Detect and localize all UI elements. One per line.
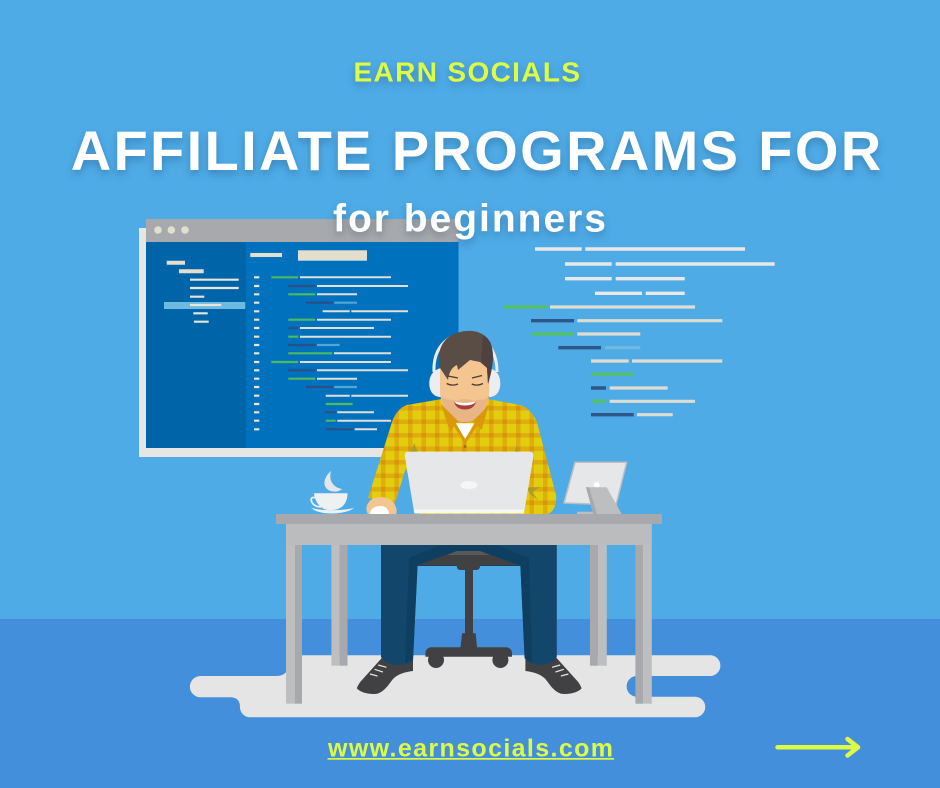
headphone ear cups bbox=[429, 368, 500, 397]
right shoe bbox=[525, 658, 582, 694]
desktop monitor bbox=[564, 462, 627, 514]
hand on mouse bbox=[366, 497, 397, 514]
website link: www.earnsocials.com bbox=[327, 734, 613, 762]
desk bbox=[276, 514, 662, 704]
arrow bbox=[778, 739, 858, 756]
office chair bbox=[418, 551, 519, 668]
floor rug shape bbox=[190, 655, 720, 717]
code editor window bbox=[139, 219, 458, 457]
background floor bbox=[0, 619, 940, 788]
hair bbox=[439, 331, 493, 384]
coffee cup with steam bbox=[311, 471, 354, 514]
laptop bbox=[405, 452, 534, 514]
subtitle: for beginners bbox=[333, 198, 606, 241]
left shoe bbox=[357, 658, 413, 694]
main title: AFFILIATE PROGRAMS FOR bbox=[71, 119, 881, 182]
headphone band bbox=[434, 334, 497, 372]
face bbox=[440, 350, 489, 422]
beard bbox=[441, 396, 488, 422]
person bbox=[366, 331, 556, 514]
background wall bbox=[0, 0, 940, 619]
eyes and brows bbox=[447, 376, 483, 385]
floating code lines bbox=[504, 249, 775, 415]
shirt collar bbox=[441, 404, 489, 448]
mouth bbox=[454, 402, 476, 410]
shirt folds bbox=[411, 443, 540, 500]
shirt bbox=[368, 399, 556, 514]
back table legs bbox=[331, 545, 607, 666]
brand heading: EARN SOCIALS bbox=[354, 57, 580, 88]
jeans bbox=[381, 545, 557, 665]
